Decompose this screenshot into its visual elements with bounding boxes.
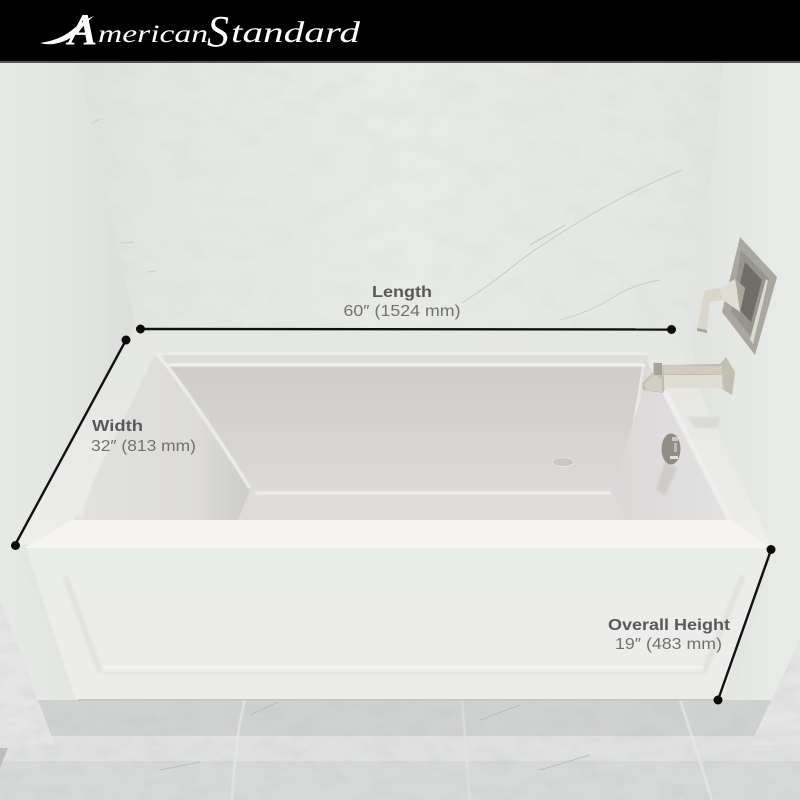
label: length: Length — [372, 284, 432, 301]
floor tiles — [0, 666, 800, 800]
dimension line: width — [11, 336, 130, 550]
left wall — [0, 62, 135, 745]
label: width — [91, 418, 196, 455]
logo: American Standard: A — [65, 5, 97, 54]
label: overall height — [608, 617, 731, 653]
label: width: 32″ (813 mm) — [91, 438, 196, 455]
tub deck — [15, 332, 772, 548]
dimension line: overall height — [714, 545, 776, 704]
label: overall height: 19″ (483 mm) — [615, 636, 722, 653]
basin floor slope — [235, 490, 645, 520]
basin left side — [74, 355, 250, 520]
bathtub — [15, 332, 772, 548]
faucet handle wall plate — [697, 237, 777, 355]
basin right side — [612, 358, 730, 520]
label: width: Width — [92, 418, 143, 435]
front lip — [24, 520, 770, 548]
tub spout — [642, 357, 735, 395]
lever handle — [697, 279, 745, 333]
apron panel — [26, 548, 768, 700]
basin lip — [155, 353, 650, 366]
right wall — [692, 62, 800, 745]
logo: American Standard: merican — [98, 21, 208, 48]
logo: American Standard: tandard — [231, 16, 361, 49]
label: overall height: Overall Height — [608, 617, 731, 634]
back wall — [91, 118, 682, 320]
logo: American Standard: S — [207, 7, 229, 56]
logo band — [0, 0, 800, 63]
label: length: 60″ (1524 mm) — [344, 303, 460, 320]
dimension line: length — [136, 324, 676, 334]
overflow shadow — [656, 462, 677, 495]
logo: American Standard — [40, 5, 361, 56]
basin back wall — [168, 366, 642, 490]
drain — [552, 458, 574, 466]
basin highlights — [155, 354, 730, 520]
label: length — [344, 284, 460, 320]
overflow plate — [662, 434, 680, 464]
